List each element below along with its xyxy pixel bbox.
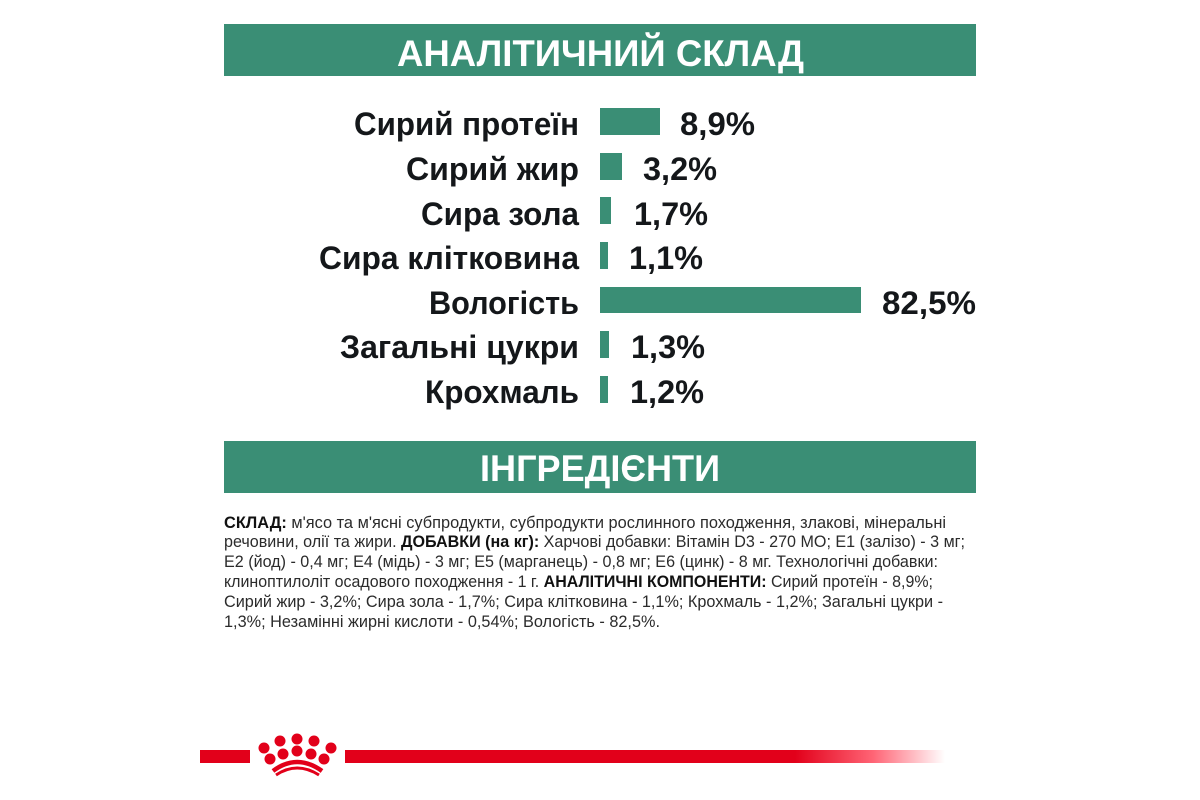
heading band: ingredients bbox=[224, 441, 976, 493]
row: crude fat: 3,2% bbox=[643, 151, 717, 187]
row: crude fat: Сирий жир bbox=[406, 151, 579, 187]
row: crude fibre bbox=[319, 240, 703, 276]
row: crude fibre: Сира клітковина bbox=[319, 240, 579, 276]
text block: ingredients list bbox=[224, 513, 965, 631]
row: crude ash: Сира зола bbox=[421, 196, 579, 232]
heading band: analytical composition bbox=[224, 24, 976, 76]
row: crude protein: 8,9% bbox=[680, 106, 755, 142]
row: total sugars: Загальні цукри bbox=[340, 329, 579, 365]
row: total sugars bbox=[340, 329, 705, 365]
text block: ingredients list: 1,3%; Незамінні жирні кислоти - 0,54%; Вологість - 82,5%. bbox=[224, 612, 660, 631]
row: moisture: Вологість bbox=[429, 285, 579, 321]
icon: red crown logo bbox=[258, 734, 336, 775]
row: moisture: 82,5% bbox=[882, 285, 976, 321]
bar chart: analytical composition bbox=[319, 106, 976, 410]
row: moisture bbox=[429, 285, 976, 321]
row: crude protein bbox=[354, 106, 755, 142]
heading band: analytical composition: АНАЛІТИЧНИЙ СКЛАД bbox=[397, 32, 804, 74]
text block: ingredients list: Е2 (йод) - 0,4 мг; Е4 (мідь) - 3 мг; Е5 (марганець) - 0,8 мг; Е6 (цинк) - 8 мг. Технологічні добавки: bbox=[224, 552, 938, 571]
row: crude fibre: 1,1% bbox=[629, 240, 703, 276]
text block: ingredients list: Сирий жир - 3,2%; Сира зола - 1,7%; Сира клітковина - 1,1%; Крохмаль - 1,2%; Загальні цукри - bbox=[224, 592, 943, 611]
heading band: ingredients: ІНГРЕДІЄНТИ bbox=[480, 448, 720, 489]
row: starch bbox=[425, 374, 704, 410]
row: starch: 1,2% bbox=[630, 374, 704, 410]
row: crude ash bbox=[421, 196, 708, 232]
row: total sugars: 1,3% bbox=[631, 329, 705, 365]
row: crude ash: 1,7% bbox=[634, 196, 708, 232]
footer: red brand line bbox=[200, 750, 945, 763]
row: starch: Крохмаль bbox=[425, 374, 579, 410]
text block: ingredients list: СКЛАД: м'ясо та м'ясні субпродукти, субпродукти рослинного походження, злакові, мінеральні bbox=[224, 513, 946, 532]
row: crude protein: Сирий протеїн bbox=[354, 106, 579, 142]
text block: ingredients list: клиноптилоліт осадового походження - 1 г. АНАЛІТИЧНІ КОМПОНЕНТИ: Сирий протеїн - 8,9%; bbox=[224, 572, 933, 591]
row: crude fat bbox=[406, 151, 717, 187]
text block: ingredients list: речовини, олії та жири. ДОБАВКИ (на кг): Харчові добавки: Вітамін D3 - 270 МО; Е1 (залізо) - 3 мг; bbox=[224, 532, 965, 551]
